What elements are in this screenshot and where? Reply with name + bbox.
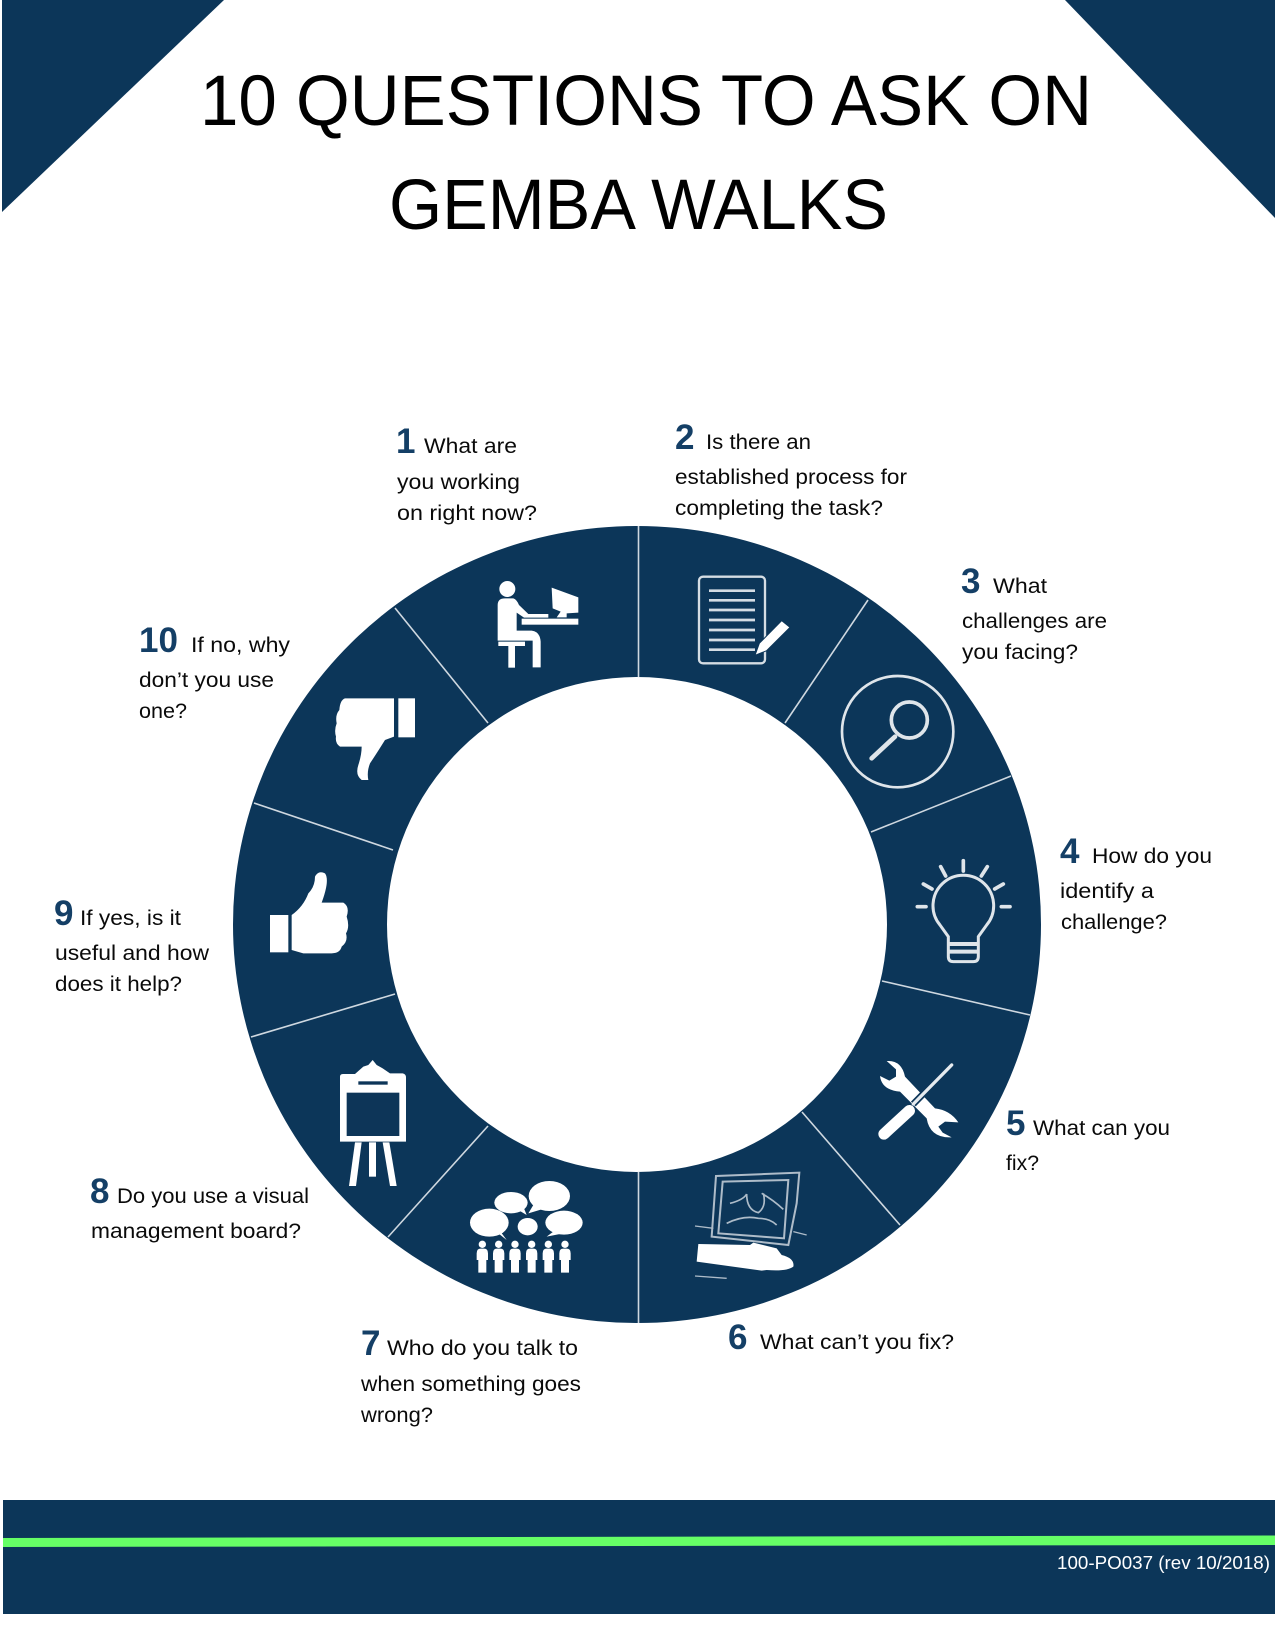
question 5: fix? [1006, 1151, 1039, 1175]
icon: light bulb [917, 861, 1010, 962]
question 2: completing the task? [675, 496, 883, 520]
top-left corner triangle [2, 0, 224, 212]
title [200, 62, 1092, 245]
icon: computer with sad face [695, 1173, 807, 1278]
question 1: What are [424, 434, 517, 458]
icon: easel board [340, 1060, 406, 1186]
document revision code: 100-PO037 (rev 10/2018) [1057, 1552, 1270, 1573]
question 9 [54, 894, 209, 996]
question 5: What can you [1033, 1116, 1170, 1140]
question 6 [728, 1318, 954, 1357]
question 2: established process for [675, 465, 907, 489]
question 8: Do you use a visual [117, 1184, 309, 1208]
title: 10 QUESTIONS TO ASK ON [200, 62, 1092, 141]
question 8: 8 [90, 1172, 109, 1211]
question 2: Is there an [706, 430, 811, 454]
footer band [3, 1500, 1275, 1614]
question 9: does it help? [55, 972, 182, 996]
question 9: 9 [54, 894, 73, 933]
question 10: If no, why [191, 633, 290, 657]
question 3 [961, 562, 1107, 664]
question 7: when something goes [360, 1372, 581, 1396]
question 1: you working [397, 470, 520, 494]
icon: thumbs down [335, 698, 415, 780]
question 7: wrong? [360, 1403, 433, 1427]
question 1 [396, 422, 537, 525]
icon: person working at desk [498, 581, 578, 668]
question 10 [139, 621, 290, 723]
ring of ten segments [233, 526, 1041, 1323]
question 1: on right now? [397, 501, 537, 525]
question 3: challenges are [962, 609, 1107, 633]
question 6: 6 [728, 1318, 747, 1357]
question 10: don’t you use [139, 668, 274, 692]
question 4: identify a [1060, 879, 1154, 903]
question 1: 1 [396, 422, 415, 461]
question 4: 4 [1060, 832, 1080, 871]
question 6: What can’t you fix? [760, 1330, 954, 1354]
icon: thumbs up [270, 872, 348, 953]
icon: wrench and screwdriver [880, 1061, 958, 1137]
question 7: Who do you talk to [387, 1336, 578, 1360]
question 8: management board? [91, 1219, 301, 1243]
question 10: one? [139, 699, 187, 723]
question 3: you facing? [962, 640, 1078, 664]
question 9: If yes, is it [80, 906, 181, 930]
question 7 [360, 1324, 581, 1427]
question 7: 7 [361, 1324, 380, 1363]
question 2 [675, 418, 907, 520]
icon: magnifying glass in circle [842, 676, 953, 787]
question 4: How do you [1092, 844, 1212, 868]
top-right corner triangle [1065, 0, 1275, 218]
icon: document with pencil [699, 577, 790, 663]
question 10: 10 [139, 621, 178, 660]
question 5: 5 [1006, 1104, 1025, 1143]
question 2: 2 [675, 418, 694, 457]
question 4: challenge? [1061, 910, 1167, 934]
question 9: useful and how [55, 941, 209, 965]
question 3: 3 [961, 562, 980, 601]
icon: people with speech bubbles [470, 1181, 583, 1273]
question 4 [1060, 832, 1212, 934]
question 8 [90, 1172, 309, 1243]
title: GEMBA WALKS [389, 166, 888, 245]
question 5 [1006, 1104, 1170, 1175]
question 3: What [993, 574, 1047, 598]
